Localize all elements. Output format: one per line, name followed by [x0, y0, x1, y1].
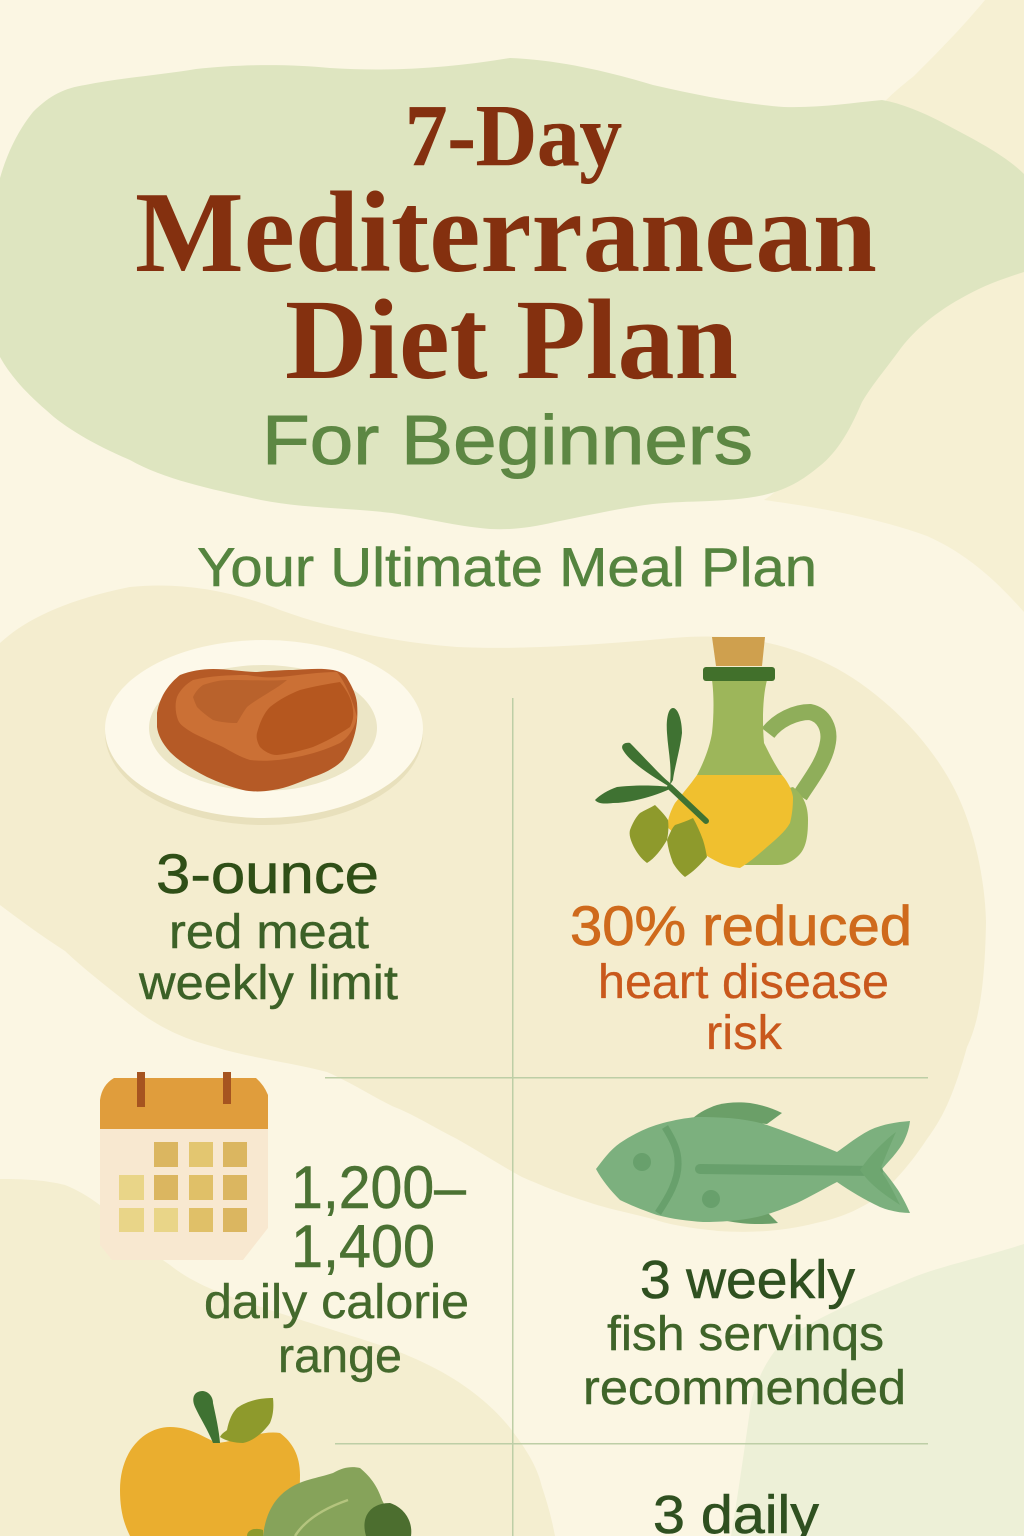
icon: calendar	[100, 1072, 268, 1260]
stat: 3-ounce red meat: red meat	[169, 906, 369, 959]
title: Diet Plan	[285, 276, 738, 403]
title: 7-Day	[405, 88, 622, 185]
title	[135, 88, 877, 403]
icon: olive oil bottle	[595, 637, 828, 877]
stat: weekly fish servings: 3 weekly	[640, 1250, 855, 1310]
horizontal divider	[335, 1443, 928, 1444]
stat: 30% reduced heart disease risk: heart disease	[598, 956, 889, 1009]
stat: weekly fish servings: recommended	[583, 1362, 906, 1415]
icon: fish	[596, 1102, 910, 1224]
stat: 3-ounce red meat	[138, 842, 398, 1010]
vertical divider	[512, 698, 514, 1536]
stat: 30% reduced heart disease risk	[570, 894, 912, 1060]
stat: calorie range: 1,400	[291, 1213, 435, 1280]
tagline: Your Ultimate Meal Plan	[197, 536, 817, 598]
horizontal divider	[325, 1077, 928, 1078]
stat: weekly fish servings	[583, 1250, 906, 1415]
stat: weekly fish servings: fish servinqs	[607, 1308, 884, 1361]
stat: 3-ounce red meat: weekly limit	[138, 957, 398, 1010]
heading background blob	[0, 58, 1024, 529]
subtitle: for beginners: For Beginners	[262, 401, 753, 479]
stat: 30% reduced heart disease risk: 30% reduced	[570, 894, 912, 957]
title: Mediterranean	[135, 169, 877, 297]
stat: calorie range: 1,200–	[291, 1154, 467, 1221]
icon: apple and leafy greens	[120, 1391, 411, 1536]
stat: 3-ounce red meat: 3-ounce	[156, 842, 379, 905]
stat: 30% reduced heart disease risk: risk	[706, 1007, 783, 1060]
stat: calorie range: range	[278, 1330, 402, 1383]
stat: calorie range: daily calorie	[204, 1276, 469, 1329]
stat: calorie range	[204, 1154, 469, 1383]
icon: steak on plate	[105, 640, 423, 825]
